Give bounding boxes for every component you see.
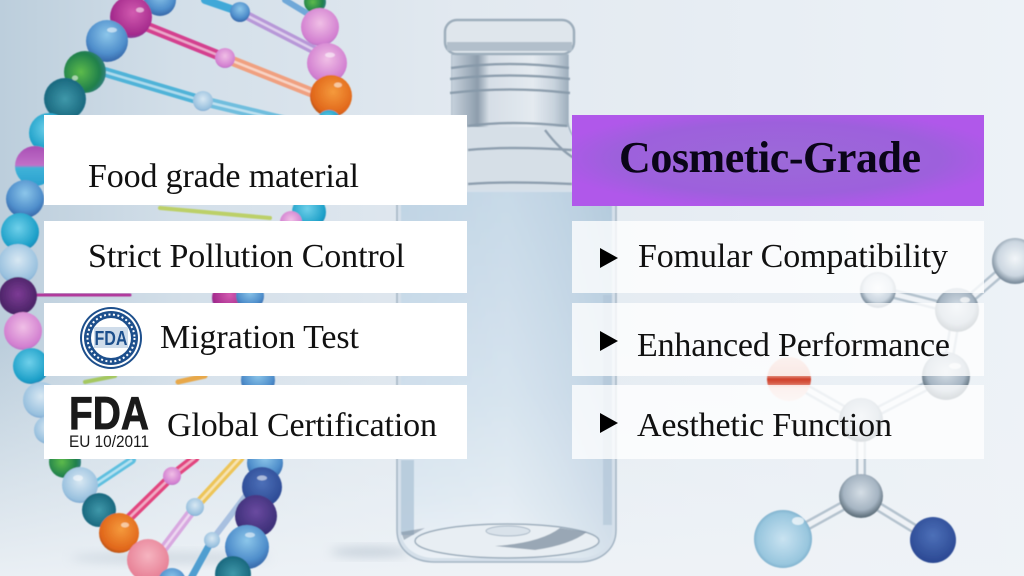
row: aesthetic function xyxy=(572,385,984,459)
row: formula compatibility: Fomular Compatibility xyxy=(638,238,948,275)
icon: FDA EU 10/2011 logo: FDA xyxy=(69,387,149,439)
row: enhanced performance xyxy=(572,303,984,376)
row: strict pollution control xyxy=(44,221,467,293)
illustration: glass bottle xyxy=(397,20,616,562)
icon: FDA EU 10/2011 logo: EU 10/2011 xyxy=(69,432,149,451)
row: enhanced performance: Enhanced Performance xyxy=(637,327,950,364)
illustration: DNA helix xyxy=(0,0,352,576)
row: strict pollution control: Strict Pollution Control xyxy=(88,238,405,275)
heading: Cosmetic-Grade: Cosmetic-Grade xyxy=(619,133,921,182)
row: formula compatibility xyxy=(572,221,984,293)
row: aesthetic function: Aesthetic Function xyxy=(637,407,892,444)
row: food grade material: Food grade material xyxy=(88,158,359,195)
row: food grade material xyxy=(44,115,467,205)
row: global certification: Global Certification xyxy=(167,407,437,444)
icon: FDA round seal xyxy=(80,307,142,369)
row: migration test xyxy=(44,303,467,376)
panel: food grade left column xyxy=(44,115,467,459)
icon: FDA round seal: FDA xyxy=(94,328,128,350)
icon: bullet arrow xyxy=(600,248,618,268)
icon: bullet arrow xyxy=(600,331,618,351)
panel: cosmetic grade right column xyxy=(572,115,984,459)
illustration: molecule xyxy=(754,238,1024,568)
icon: bullet arrow xyxy=(600,413,618,433)
row: global certification xyxy=(44,385,467,459)
row: migration test: Migration Test xyxy=(160,319,360,356)
heading: Cosmetic-Grade xyxy=(572,115,984,206)
